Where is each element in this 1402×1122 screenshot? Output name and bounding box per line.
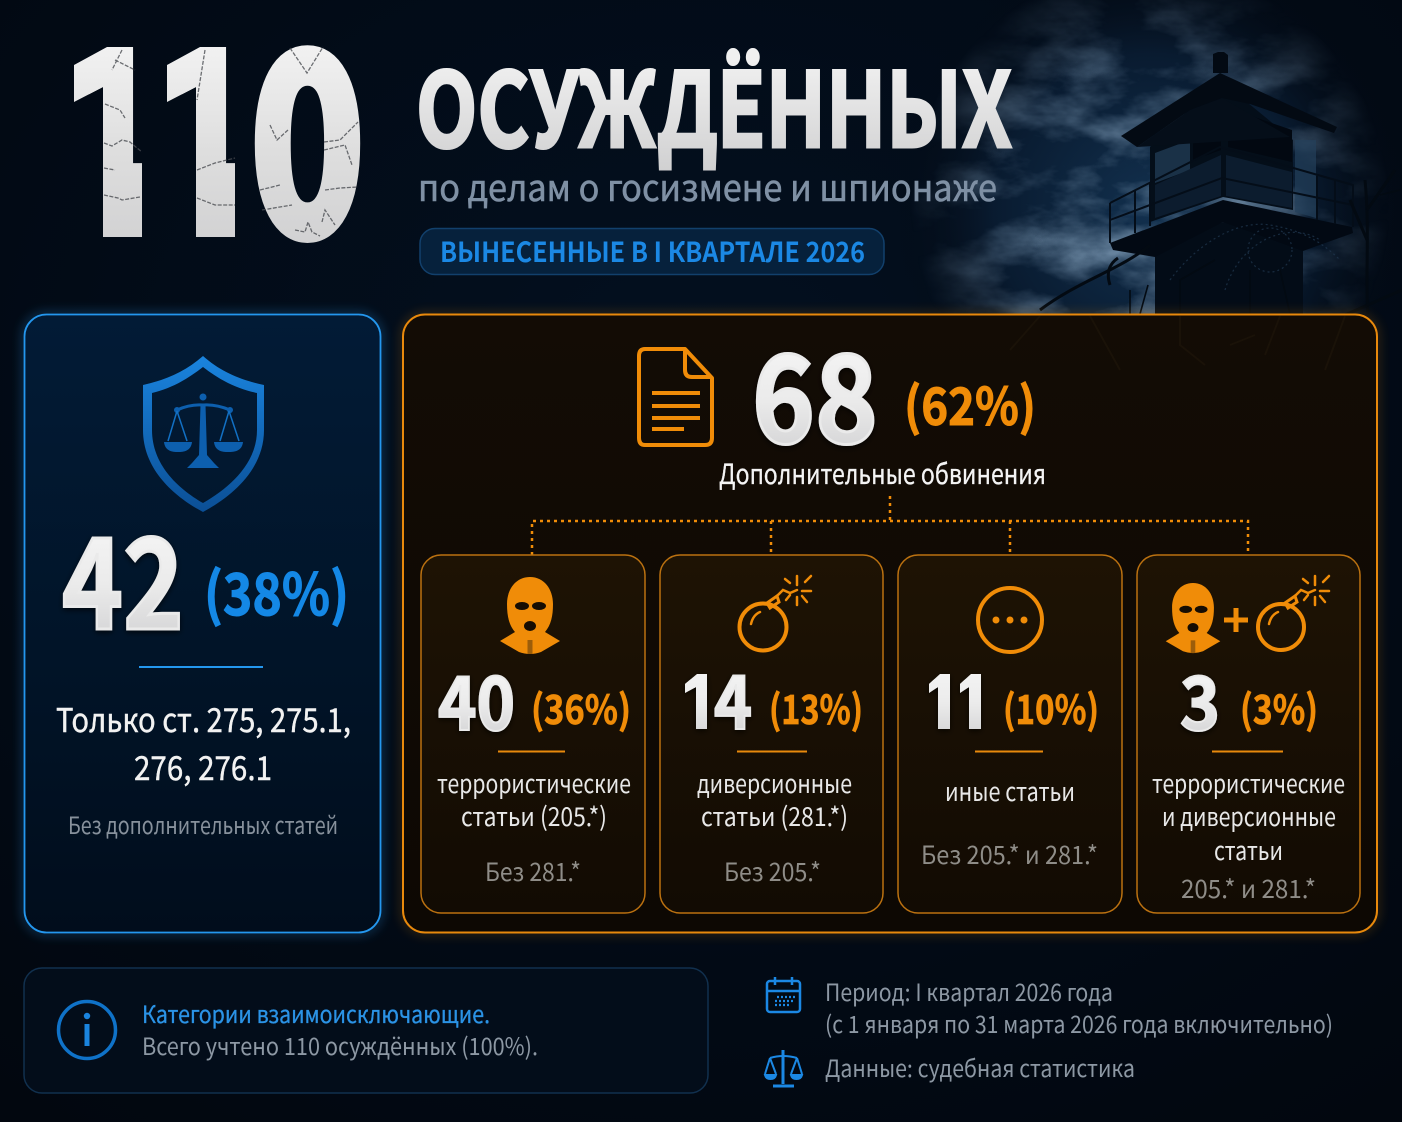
value: 11: 1 (950, 645, 994, 752)
value: 14: 4 (714, 644, 752, 751)
label: статьи (1214, 831, 1283, 868)
label: диверсионные (697, 764, 852, 801)
value: 3%: (3%) (1240, 678, 1318, 736)
icon: balaclava (500, 577, 560, 654)
text: period: Период: I квартал 2026 года (825, 973, 1113, 1008)
label: статьи (281.*) (701, 797, 848, 834)
label (437, 764, 631, 834)
panel: additional charges (403, 302, 1377, 932)
value: 36%: (36%) (531, 678, 631, 736)
connector: dotted tree (532, 496, 1248, 555)
heading: ОСУЖДЁННЫХ: ОСУЖДЁННЫХ (416, 28, 1012, 177)
label (697, 764, 852, 834)
value: 62%: (62%) (904, 365, 1036, 440)
icon: document (639, 349, 712, 445)
note: Без 205.* и 281.* (921, 836, 1098, 872)
icon: plus (1224, 608, 1248, 632)
text: data source: Данные: судебная статистика (825, 1049, 1135, 1084)
label (1152, 764, 1345, 868)
badge: period: ВЫНЕСЕННЫЕ В I КВАРТАЛЕ 2026 (440, 231, 865, 271)
value: 13%: (13%) (769, 678, 863, 736)
note: total: Всего учтено 110 осуждённых (100%). (142, 1027, 538, 1062)
label: и диверсионные (1162, 797, 1336, 834)
card: terrorist articles (421, 555, 645, 913)
note: Без 281.* (485, 853, 581, 889)
icon: bomb (1258, 576, 1329, 650)
value: 40: 40 (438, 645, 515, 752)
title number: 110 (74, 45, 360, 243)
label: articles (56, 694, 351, 790)
text: period: (с 1 января по 31 марта 2026 года включительно) (825, 1005, 1333, 1040)
label: статьи (205.*) (461, 797, 607, 834)
value: 38%: (38%) (204, 548, 349, 632)
label: additional charges: Дополнительные обвинения (719, 453, 1046, 493)
panel: note on categories (24, 968, 708, 1093)
icon: bomb (740, 576, 811, 650)
subtitle: по делам о госизмене и шпионаже (418, 158, 997, 212)
value: 3: 3 (1180, 645, 1220, 752)
icon: scales (765, 1050, 802, 1086)
note: 205.* и 281.* (1181, 870, 1316, 906)
icon: info (58, 1002, 116, 1058)
card: sabotage articles (660, 555, 883, 913)
value: 10%: (10%) (1003, 678, 1099, 736)
label: террористические (1152, 764, 1345, 801)
note: bold line: Категории взаимоисключающие. (142, 995, 490, 1030)
note: no extra articles: Без дополнительных статей (68, 806, 338, 841)
panel: only treason articles (24, 314, 380, 932)
icon: calendar (767, 977, 800, 1012)
label: террористические (437, 764, 631, 801)
label: articles: 276, 276.1 (134, 742, 272, 790)
card: other articles (898, 555, 1122, 913)
card: both article groups (1137, 555, 1360, 913)
value: 14 (685, 674, 752, 732)
label: иные статьи (945, 772, 1075, 809)
icon: balaclava (1166, 583, 1220, 653)
value: 14: 1 (676, 645, 720, 752)
icon: ellipsis circle (978, 588, 1042, 652)
value: 11: 1 (919, 645, 963, 752)
note: Без 205.* (724, 853, 821, 889)
text: period (825, 973, 1333, 1040)
label: articles: Только ст. 275, 275.1, (56, 694, 351, 742)
background: night sky with watchtower (920, 0, 1378, 314)
value: 68: 68 (752, 302, 878, 479)
value: 42: 42 (62, 484, 184, 666)
value: 11 (929, 674, 982, 731)
icon: shield with scales (143, 356, 264, 512)
